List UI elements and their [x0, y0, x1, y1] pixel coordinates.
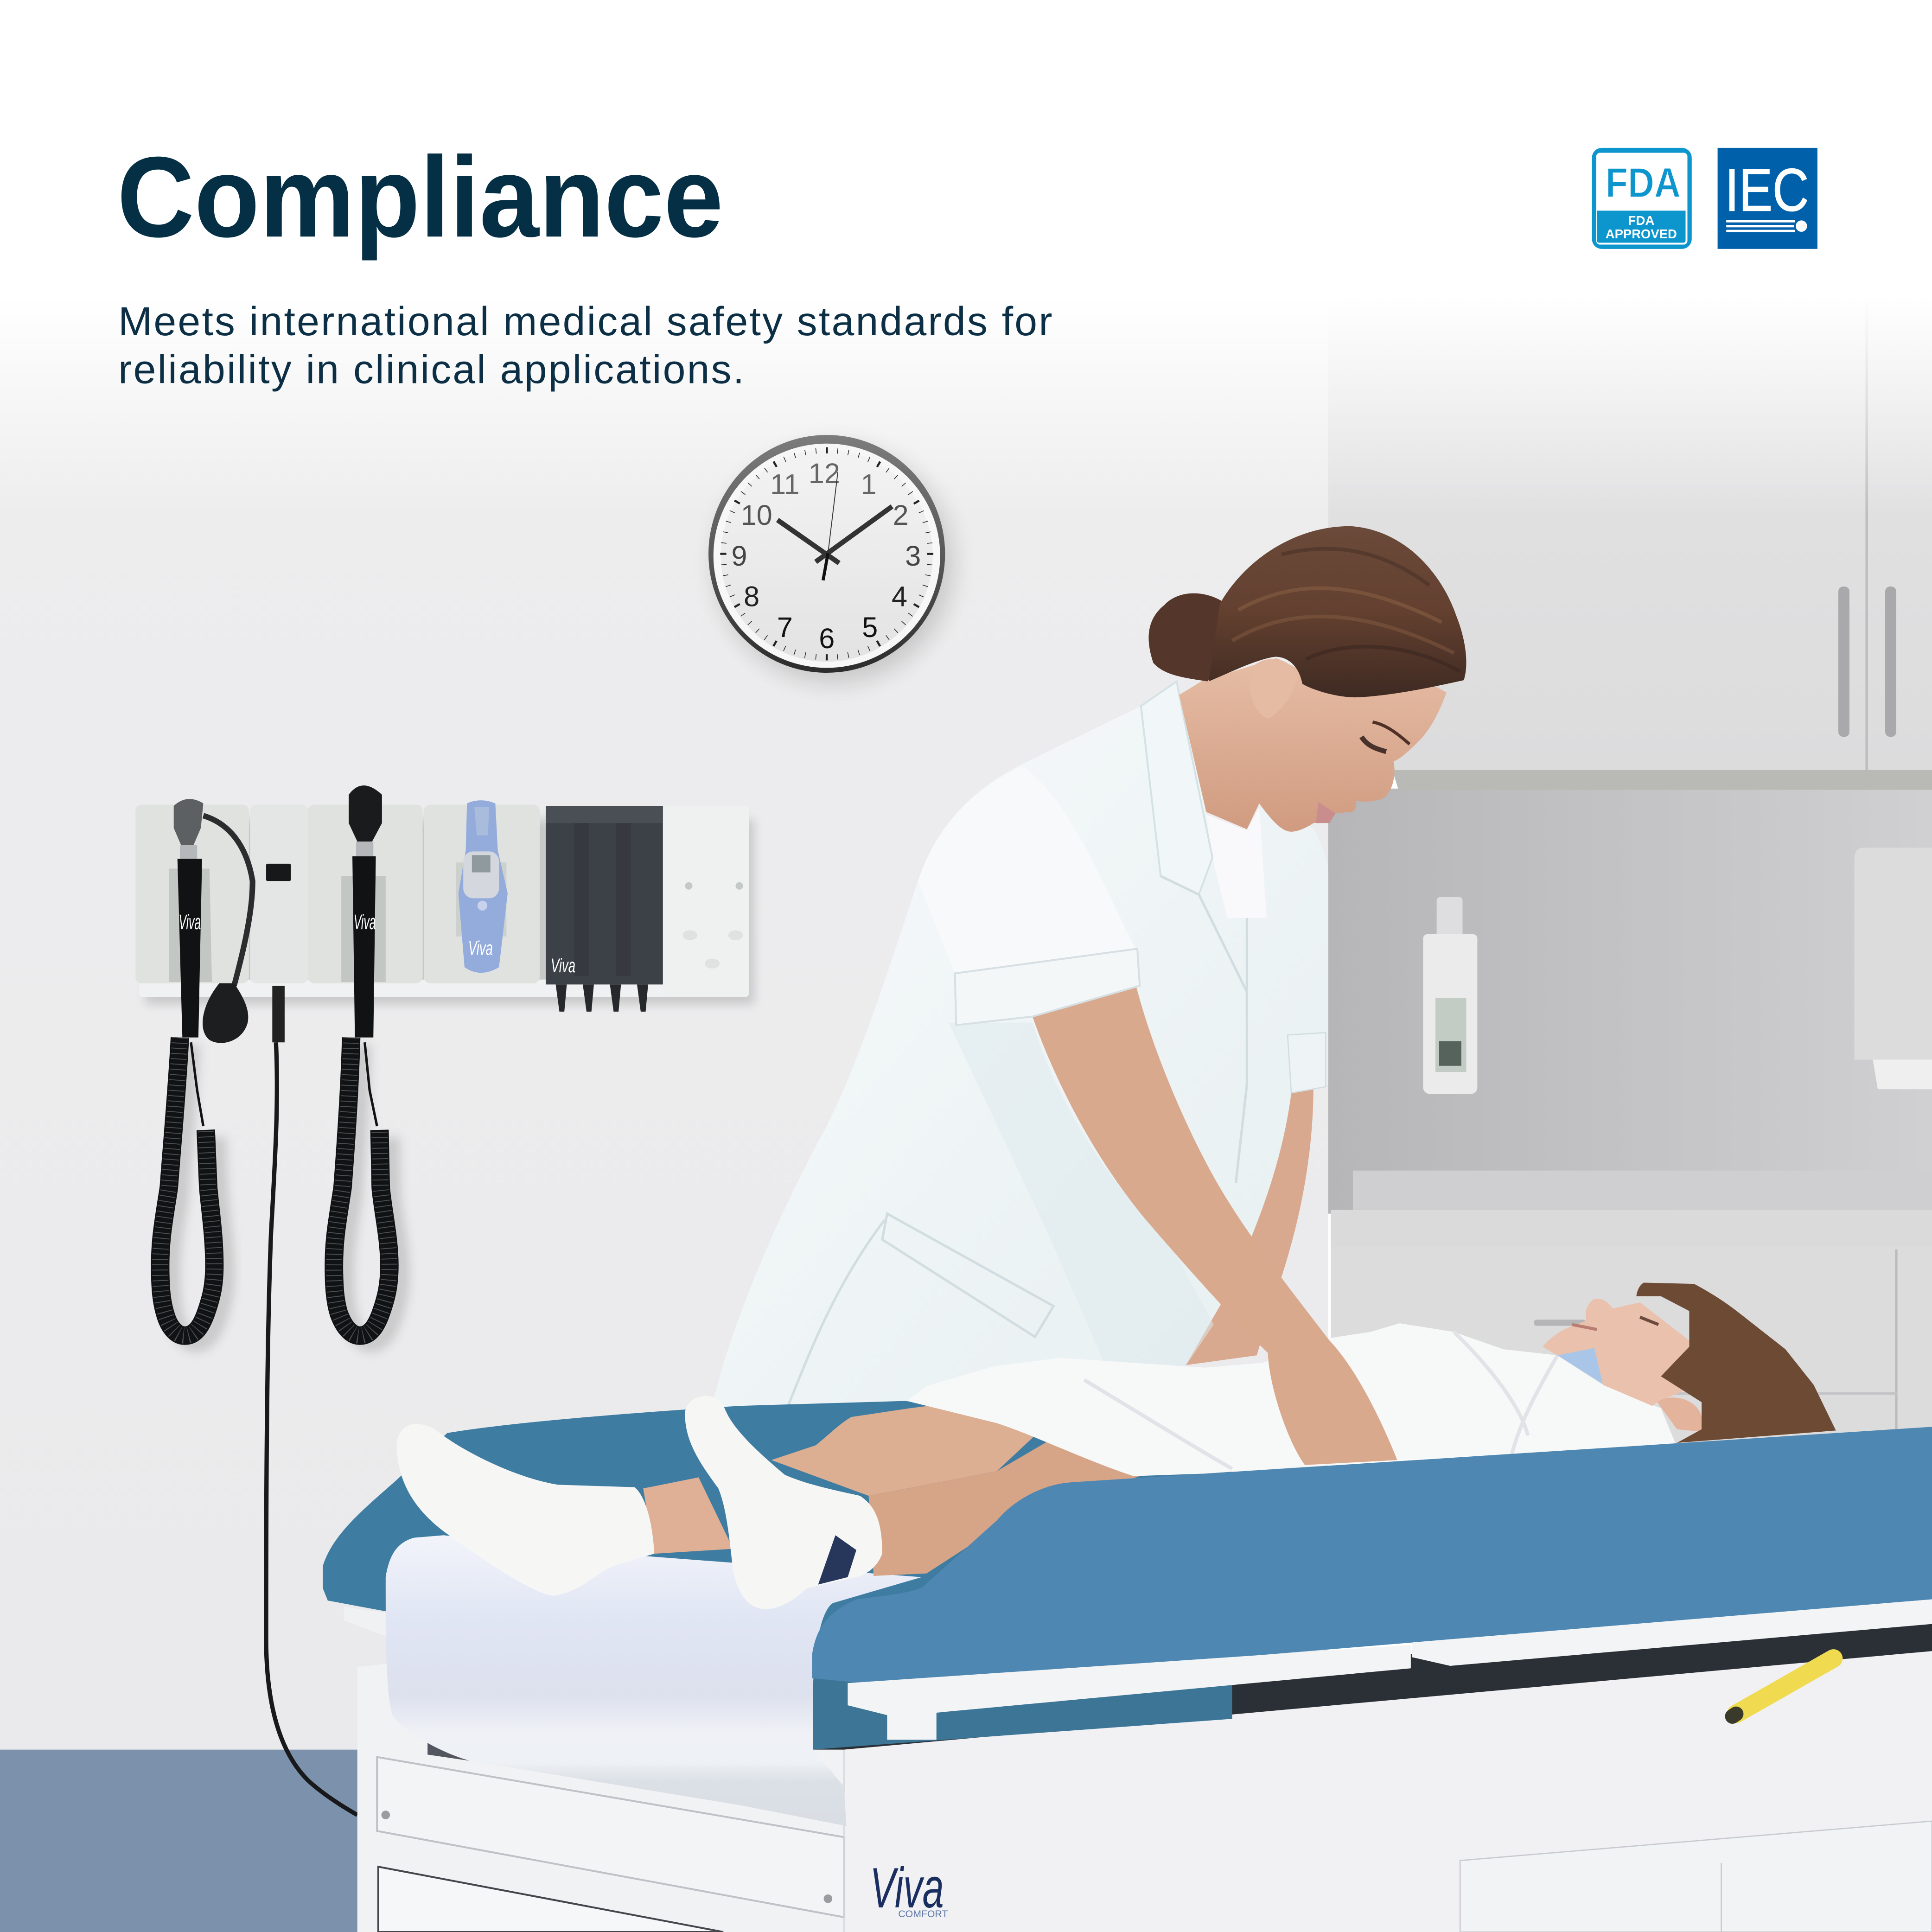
badge: FDA approved: FDA	[1606, 159, 1681, 206]
badge: FDA approved: APPROVED	[1606, 227, 1677, 241]
lower lapel edge	[1160, 876, 1247, 992]
Viva Comfort logo: Viva	[870, 1856, 944, 1919]
title: Compliance	[117, 133, 723, 261]
ophthalmoscope	[349, 785, 382, 1038]
top white fade	[0, 0, 1932, 517]
clock numerals: 9	[732, 540, 747, 572]
clock numerals: 7	[777, 612, 793, 643]
ear	[1250, 659, 1297, 718]
far arm	[1186, 1084, 1314, 1365]
dark gap under table top	[813, 1608, 1932, 1750]
mounting rail	[139, 980, 748, 997]
clock numerals: 12	[809, 458, 840, 489]
thigh	[772, 1401, 1035, 1496]
Viva Comfort logo: COMFORT	[898, 1908, 948, 1919]
wall-mounted diagnostic panel	[135, 785, 754, 1815]
clock numerals: 8	[744, 581, 759, 612]
background: wall	[0, 0, 1328, 1756]
hair	[1209, 526, 1466, 697]
clock numerals: 4	[892, 581, 907, 612]
subtitle text	[118, 299, 1052, 392]
otoscope with bulb	[174, 799, 253, 1043]
module housings	[135, 804, 540, 983]
dark specula dispenser: Viva	[551, 955, 575, 977]
clock numerals: 1	[861, 469, 877, 500]
table side rails	[848, 1599, 1932, 1740]
inner shirt	[1206, 807, 1267, 918]
coiled cord, right	[334, 1038, 401, 1343]
switch	[266, 864, 291, 881]
badge: FDA approved: FDA	[1628, 213, 1654, 228]
forearm and hand	[1033, 986, 1397, 1465]
face and neck	[1179, 658, 1447, 832]
badge: FDA approved	[1592, 148, 1692, 249]
otoscope with bulb: Viva	[179, 910, 201, 934]
sleeve cuff	[955, 949, 1140, 1025]
lower mattress strip	[812, 1651, 1232, 1750]
socks	[397, 1396, 882, 1609]
clock numerals: 10	[741, 499, 772, 531]
far side and foot of table pad	[323, 1401, 1232, 1678]
subtitle text: Meets international medical safety standards for	[118, 299, 1052, 344]
gown folds	[1084, 1332, 1557, 1469]
room: right side cabinetry	[1328, 0, 1932, 1444]
boy hair	[1636, 1282, 1836, 1443]
badge: IEC: IEC	[1725, 156, 1809, 223]
power cord	[266, 986, 357, 1815]
badge: IEC	[1718, 148, 1817, 249]
right mounting plate	[663, 806, 749, 997]
coiled cord, left	[160, 1038, 225, 1343]
upper sleeve	[918, 766, 1137, 973]
nurse: body and head	[712, 526, 1466, 1407]
front leg	[869, 1441, 1140, 1576]
hair bun	[1148, 593, 1238, 682]
ophthalmoscope: Viva	[354, 910, 376, 934]
coat shading	[789, 918, 1326, 1405]
floor	[0, 1750, 370, 1932]
boy face	[1543, 1299, 1694, 1406]
clock numerals	[732, 458, 921, 654]
coat body	[712, 682, 1328, 1407]
yellow handle	[1732, 1658, 1833, 1716]
soap dispenser	[1423, 897, 1477, 1094]
lower leg behind	[643, 1477, 733, 1554]
clock numerals: 11	[770, 469, 800, 500]
dark specula dispenser	[546, 806, 663, 1012]
mouth and eye	[1316, 722, 1409, 823]
coat lapel	[1141, 682, 1212, 894]
clock numerals: 6	[819, 623, 835, 654]
child patient	[643, 1282, 1836, 1576]
boy eye and mouth	[1572, 1317, 1658, 1329]
boy ear	[1657, 1397, 1702, 1432]
nurse: near arm, hand and sleeve	[918, 766, 1397, 1465]
wall clock	[708, 435, 952, 682]
blue thermometer: Viva	[468, 938, 493, 960]
collar	[1557, 1348, 1604, 1385]
clock numerals: 3	[905, 540, 921, 572]
examination table base	[357, 1649, 1932, 1932]
paper sheet and roll	[386, 1535, 922, 1826]
near side table bolster	[812, 1427, 1932, 1687]
gown	[907, 1323, 1676, 1476]
blue thermometer	[459, 800, 508, 973]
clock hands	[778, 472, 892, 580]
clock numerals: 2	[893, 499, 909, 531]
subtitle text: reliability in clinical applications.	[118, 346, 744, 392]
clock numerals: 5	[862, 612, 878, 643]
